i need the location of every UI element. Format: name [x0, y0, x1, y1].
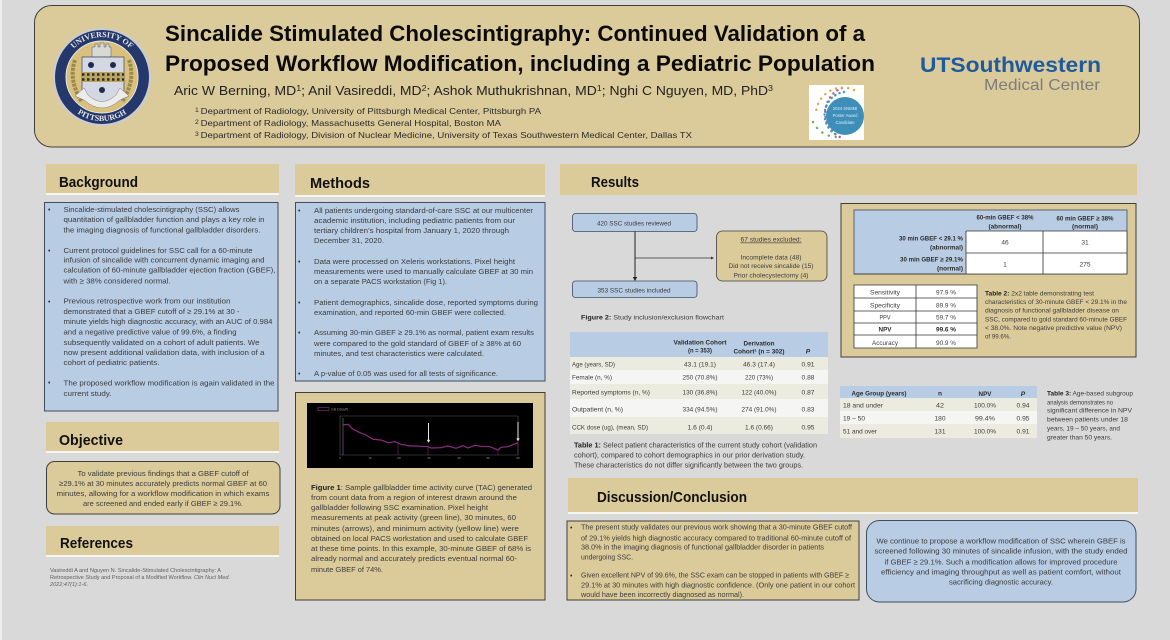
icon: poster award badge: Candidate — [835, 120, 855, 125]
chart: gallbladder time activity curve: 0 — [339, 456, 341, 460]
table 1 caption — [574, 440, 817, 470]
table 1 caption: These characteristics do not differ significantly between the two groups. — [574, 460, 803, 470]
table: test characteristics: NPV — [878, 326, 892, 334]
affiliations: Department of Radiology, Massachusetts General Hospital, Boston MA — [201, 118, 501, 128]
panel: objective text: minutes, allowing for a workflow modification in which exams — [56, 489, 270, 498]
arrow: reviewed to included — [633, 232, 637, 281]
heading: Objective: Objective — [59, 432, 123, 449]
table 1: patient characteristics: 46.3 (17.4) — [743, 362, 775, 368]
panel: methods text: Data were processed on Xeleris workstations. Pixel height — [314, 257, 516, 266]
table 3 caption: years, 19 – 50 years, and — [1047, 426, 1120, 432]
panel: discussion text: Given excellent NPV of 99.6%, the SSC exam can be stopped in patients with GBEF ≥ — [581, 570, 849, 580]
heading: References: References — [60, 535, 133, 552]
table: test characteristics: 59.7 % — [936, 314, 956, 322]
heading: Background — [46, 164, 279, 195]
table 3: age subgroup analysis — [840, 386, 1037, 438]
authors: ; Anil Vasireddi, MD — [301, 84, 422, 98]
panel: background text: with ≥ 38% considered normal. — [62, 276, 170, 286]
panel: methods text: • — [298, 371, 301, 378]
heading: Methods: Methods — [310, 175, 370, 192]
table 3: age subgroup analysis: 131 — [934, 428, 946, 436]
table: test characteristics: Accuracy — [872, 340, 899, 347]
table 1: patient characteristics: 0.83 — [802, 406, 815, 414]
panel: methods text: Patient demographics, sincalide dose, reported symptoms during — [314, 298, 538, 307]
flow box: excluded studies: Did not receive sincalide (15) — [728, 263, 814, 270]
heading: Discussion/Conclusion — [568, 478, 1138, 514]
chart: gallbladder time activity curve: 30 — [427, 456, 431, 460]
figure 1 caption: measurements at peak activity (green line), 30 minutes, 60 — [311, 513, 516, 522]
table 1: patient characteristics: 0.91 — [802, 362, 815, 368]
table: test characteristics: 89.9 % — [936, 302, 956, 310]
panel: background text: calculation of 60-minute gallbladder ejection fraction (GBEF), — [64, 266, 276, 274]
figure 1 caption: Figure 1: Sample gallbladder time activity curve (TAC) generated — [311, 483, 532, 492]
panel: methods text: on a separate PACS workstation (Fig 1). — [314, 277, 447, 286]
panel: methods text: measurements were used to manually calculate GBEF at 30 min — [314, 267, 533, 276]
table 2: 2x2 contingency: (abnormal) — [930, 244, 963, 252]
table 2: 2x2 contingency — [854, 210, 1127, 274]
table: test characteristics — [854, 285, 977, 348]
table 2 caption: diagnosis of functional gallbladder disease on — [985, 308, 1119, 314]
affiliations: Department of Radiology, Division of Nuclear Medicine, University of Texas Southwestern Medical Center, Dallas TX — [201, 130, 692, 140]
table 2: 2x2 contingency: 46 — [1001, 240, 1009, 246]
heading: Results — [560, 164, 1137, 195]
panel: background text: the imaging diagnosis of functional gallbladder disorders. — [64, 226, 260, 234]
flow box: studies included: 353 SSC studies included — [598, 288, 671, 294]
table 2: 2x2 contingency: 30 min GBEF < 29.1 % — [899, 236, 963, 242]
table 2: 2x2 contingency: (abnormal) — [988, 224, 1022, 230]
affiliations: 1 — [195, 108, 201, 114]
table 2: 2x2 contingency: (normal) — [937, 266, 963, 272]
figure 1 caption — [311, 483, 532, 574]
panel: conclusion callout: sacrificing diagnostic accuracy. — [949, 578, 1053, 586]
panel: background text: • — [48, 380, 51, 387]
table 3: age subgroup analysis: NPV — [978, 391, 992, 398]
panel: background text: infusion of sincalide with concurrent dynamic imaging and — [64, 256, 264, 264]
table 1: patient characteristics: Age (years, SD) — [572, 362, 615, 368]
panel: background text: • — [48, 248, 51, 255]
panel: objective text: To validate previous findings that a GBEF cutoff of — [78, 469, 249, 478]
authors: 3 — [768, 84, 774, 93]
panel: background text: minute yields high diagnostic accuracy, with an AUC of 0.984 — [64, 317, 273, 326]
panel: background text: cohort of pediatric patients. — [64, 358, 160, 367]
chart: gallbladder time activity curve: 20 — [397, 456, 401, 460]
heading: Discussion/Conclusion: Discussion/Conclusion — [597, 489, 747, 506]
figure 1 caption: minutes (arrows), and minimum activity (yellow line) were — [311, 524, 519, 533]
table 1: patient characteristics: 43.1 (19.1) — [684, 362, 716, 368]
figure 1 caption: minute GBEF of 74%. — [311, 565, 383, 574]
figure 1 caption: obtained on local PACS workstation and used to calculate GBEF — [311, 534, 528, 543]
panel: background text — [44, 202, 278, 411]
table 3 caption: Table 3: Age-based subgroup — [1047, 390, 1133, 398]
panel: methods text: • — [298, 259, 301, 266]
table: test characteristics: 99.6 % — [936, 326, 956, 334]
chart: gallbladder time activity curve: 50 — [486, 456, 490, 460]
affiliations — [195, 106, 692, 140]
table 3: age subgroup analysis: 0.95 — [1016, 416, 1030, 422]
panel: methods text: • — [298, 330, 301, 337]
flow box: studies reviewed — [572, 214, 697, 232]
panel: figure 1 — [296, 392, 545, 600]
table 2: 2x2 contingency: 60 min GBEF ≥ 38% — [1056, 216, 1114, 222]
panel: poster header — [34, 5, 1140, 148]
table 1 caption: cohort), compared to cohort demographics in our prior derivation study. — [574, 450, 805, 460]
figure 2 caption: Figure 2: Study inclusion/exclusion flowchart — [581, 314, 724, 322]
table 3 caption: between patients under 18 — [1047, 416, 1128, 424]
panel: conclusion callout — [866, 520, 1136, 602]
panel: conclusion callout: if GBEF ≥ 29.1%. Such a modification allows for improved procedure — [884, 558, 1118, 566]
heading: Methods — [295, 164, 545, 197]
table 1: patient characteristics: Outpatient (n, %) — [572, 406, 623, 414]
flow box: excluded studies: Incomplete data (48) — [740, 254, 802, 262]
figure 1 caption: gallbladder following SSC examination. Pixel height — [311, 503, 489, 512]
table 1: patient characteristics: Derivation — [744, 340, 774, 348]
panel: discussion text: undergoing SSC. — [581, 552, 633, 562]
heading: Results: Results — [591, 174, 639, 191]
flow box: studies reviewed: 420 SSC studies reviewed — [597, 220, 671, 228]
flow box: studies included — [572, 281, 697, 298]
icon: University of Pittsburgh seal — [53, 28, 151, 126]
table 1: patient characteristics: 334 (94.5%) — [682, 406, 718, 414]
table 3: age subgroup analysis: P — [1021, 391, 1026, 398]
panel: discussion text: would have been incorrectly diagnosed as normal). — [580, 590, 744, 599]
table 2: 2x2 contingency: 60-min GBEF < 38% — [976, 214, 1034, 222]
panel: methods text: were compared to the gold standard of GBEF of ≥ 38% at 60 — [313, 339, 521, 348]
flow box: excluded studies: Prior cholecystectomy (4) — [734, 272, 808, 280]
panel: discussion text — [567, 521, 859, 600]
panel: background text: The proposed workflow modification is again validated in the — [64, 378, 274, 388]
panel: background text: now present additional validation data, with inclusion of a — [64, 348, 265, 357]
reference text: Vasireddi A and Nguyen N. Sincalide-Stimulated Cholescintigraphy: A — [50, 568, 221, 574]
heading: Objective — [46, 422, 279, 453]
table 2 caption: Table 2: 2x2 table demonstrating test — [985, 290, 1094, 298]
table 1: patient characteristics: (n = 353) — [688, 348, 712, 354]
panel: discussion text: • — [570, 573, 573, 580]
panel: methods text: A p-value of 0.05 was used for all tests of significance. — [314, 369, 498, 378]
panel: conclusion callout: We continue to propose a workflow modification of SSC wherein GBEF is — [876, 536, 1126, 546]
panel: conclusion callout: screened following 30 minutes of sincalide infusion, with the study ended — [874, 546, 1128, 556]
table 1: patient characteristics: 0.88 — [802, 374, 815, 382]
reference text — [49, 568, 230, 588]
table 3: age subgroup analysis: Age Group (years) — [852, 390, 906, 398]
table 1: patient characteristics: Validation Cohort — [674, 340, 727, 346]
table 3: age subgroup analysis: 99.4% — [975, 416, 995, 422]
table 2 caption: characteristics of 30-minute GBEF < 29.1% in the — [985, 299, 1127, 306]
table 1: patient characteristics: 130 (36.8%) — [682, 390, 718, 396]
table: test characteristics: Sensitivity — [870, 290, 901, 296]
logo: UT Southwestern Medical Center: Medical Center — [984, 77, 1101, 94]
table 3: age subgroup analysis: 100.0% — [974, 402, 996, 410]
panel: discussion text: • — [570, 525, 573, 532]
chart: gallbladder time activity curve: 40 — [457, 456, 461, 460]
panel: background text: quantitation of gallbladder function and plays a key role in — [64, 215, 264, 224]
flowchart: study inclusion — [572, 214, 827, 298]
table 1: patient characteristics — [570, 332, 828, 434]
table 1: patient characteristics: 220 (73%) — [745, 374, 773, 382]
table 3: age subgroup analysis: n — [938, 390, 942, 398]
table 2 caption: of 99.6%. — [985, 334, 1011, 340]
flow box: excluded studies — [716, 231, 827, 281]
table 1: patient characteristics: 1.6 (0.4) — [688, 424, 712, 432]
table 1: patient characteristics: Female (n, %) — [572, 374, 612, 382]
table 1: patient characteristics: Cohort¹ (n = 302) — [734, 348, 784, 356]
panel: discussion text: 38.0% in the imaging diagnosis of functional gallbladder disorder in patients — [581, 542, 824, 552]
panel: background text: and a negative predictive value of 99.6%, a finding — [64, 328, 236, 336]
panel: objective text: are screened and ended early if GBEF ≥ 29.1%. — [83, 499, 243, 508]
table 1: patient characteristics: CCK dose (ug), (mean, SD) — [572, 424, 648, 432]
affiliations: 3 — [195, 132, 201, 138]
heading: Background: Background — [59, 174, 138, 191]
table 3 caption: analysis demonstrates no — [1047, 400, 1113, 406]
table 3: age subgroup analysis: 51 and over — [843, 428, 878, 436]
panel: objective text — [46, 462, 280, 514]
table 2 caption — [985, 290, 1127, 340]
panel: methods text: • — [298, 300, 301, 307]
authors: 2 — [422, 84, 427, 93]
table 1: patient characteristics: P — [806, 348, 811, 356]
panel: methods text: December 31, 2020. — [314, 236, 384, 245]
reference text: Retrospective Study and Proposal of a Modified Workflow. Clin Nucl Med. — [50, 575, 230, 581]
panel: background text: Current protocol guidelines for SSC call for a 60-minute — [64, 246, 253, 255]
authors: ; Nghi C Nguyen, MD, PhD — [602, 84, 768, 98]
table 3: age subgroup analysis: 0.94 — [1016, 402, 1030, 410]
table 3: age subgroup analysis: 0.91 — [1016, 428, 1030, 436]
panel: methods text: academic institution, including pediatric patients from our — [314, 216, 515, 225]
table 2 caption: SSC, compared to gold standard 60-minute GBEF — [985, 316, 1127, 324]
panel: background text: Sincalide-stimulated cholescintigraphy (SSC) allows — [64, 205, 240, 214]
table 2: 2x2 contingency: 30 min GBEF ≥ 29.1% — [900, 256, 963, 264]
icon: poster award badge: 2024 SNMMI — [833, 106, 857, 111]
chart: gallbladder time activity curve: 10 — [368, 456, 372, 460]
panel: background text: Previous retrospective work from our institution — [64, 296, 230, 306]
panel: methods text: tertiary children’s hospital from January 1, 2020 through — [314, 226, 509, 235]
table 3: age subgroup analysis: 100.0% — [974, 428, 996, 436]
panel: methods text: • — [298, 208, 301, 215]
figure 1 caption: from count data from a region of interest drawn around the — [311, 493, 517, 502]
affiliations: 2 — [195, 120, 201, 126]
panel: table 2 — [841, 204, 1136, 357]
table 2 caption: < 38.0%. Note negative predictive value (NPV) — [985, 325, 1122, 332]
table: test characteristics: PPV — [880, 314, 891, 322]
panel: background text: • — [48, 299, 51, 306]
flow box: excluded studies: 67 studies excluded: — [740, 236, 802, 244]
table 3: age subgroup analysis: 42 — [936, 402, 944, 410]
table 1: patient characteristics: 1.6 (0.66) — [745, 424, 773, 432]
panel: discussion text: of 29.1% yields high diagnostic accuracy compared to traditional 60-minute cutoff of — [581, 534, 852, 542]
panel: conclusion callout: efficiency and imaging throughput as well as patient comfort, without — [881, 568, 1122, 576]
authors: ; Ashok Muthukrishnan, MD — [427, 84, 597, 98]
reference text: 2022;47(1):1-6. — [49, 582, 88, 588]
table 1: patient characteristics: 0.95 — [802, 424, 815, 432]
authors: 1 — [597, 84, 602, 93]
table 2: 2x2 contingency: 275 — [1079, 262, 1091, 268]
title: Proposed Workflow Modification, including a Pediatric Population — [165, 51, 875, 76]
panel: objective text: ≥29.1% at 30 minutes accurately predicts normal GBEF at 60 — [59, 479, 267, 488]
heading: References — [46, 526, 279, 557]
chart: gallbladder time activity curve — [307, 403, 533, 468]
panel: methods text: Assuming 30-min GBEF ≥ 29.1% as normal, patient exam results — [314, 328, 534, 337]
panel: background text: • — [48, 207, 51, 214]
arrow: to excluded — [635, 256, 714, 260]
table 3: age subgroup analysis: 18 and under — [843, 402, 884, 410]
affiliations: Department of Radiology, University of Pittsburgh Medical Center, Pittsburgh PA — [201, 106, 541, 116]
table 1: patient characteristics: 250 (70.8%) — [682, 374, 718, 382]
icon: University of Pittsburgh seal: PITTSBURGH — [78, 109, 127, 121]
table 3: age subgroup analysis: 19 – 50 — [843, 416, 865, 422]
table 2: 2x2 contingency: 1 — [1003, 262, 1007, 268]
table 2: 2x2 contingency: (normal) — [1072, 224, 1098, 230]
panel: background text: current study. — [64, 389, 112, 398]
panel: methods text: examination, and reported 60-min GBEF were collected. — [314, 308, 506, 317]
table: test characteristics: 97.9 % — [936, 290, 956, 296]
panel: background text: subsequently validated on a cohort of adult patients. We — [64, 338, 260, 347]
table 1: patient characteristics: 274 (91.0%) — [742, 406, 776, 414]
panel: background text: demonstrated that a GBEF cutoff of ≥ 29.1% at 30 - — [64, 307, 240, 316]
figure 1 caption: at these time points. In this example, 30-minute GBEF of 68% is — [311, 544, 531, 553]
title: Sincalide Stimulated Cholescintigraphy: Continued Validation of a — [165, 21, 865, 46]
table 3: age subgroup analysis: 180 — [934, 416, 946, 422]
authors: Aric W Berning, MD — [174, 84, 284, 98]
icon: poster award badge: Poster Award — [833, 113, 858, 118]
panel: discussion text: 29.1% at 30 minutes with high diagnostic confidence. (Only one patient in our cohort — [581, 580, 856, 590]
icon: University of Pittsburgh seal: UNIVERSITY OF — [70, 32, 134, 48]
logo: UT Southwestern Medical Center: UTSouthwestern — [920, 54, 1101, 77]
table 1 caption: Table 1: Select patient characteristics of the current study cohort (validation — [574, 440, 817, 450]
panel: methods text: minutes, and test characteristics were calculated. — [314, 349, 484, 358]
panel: discussion text: The present study validates our previous work showing that a 30-minute GBEF cutoff — [581, 522, 853, 532]
table 3 caption — [1047, 390, 1133, 442]
title — [165, 21, 875, 76]
authors: 1 — [296, 84, 302, 93]
table 1: patient characteristics: Reported symptoms (n, %) — [572, 390, 650, 396]
chart: gallbladder time activity curve: GB Data/fit — [331, 408, 348, 412]
chart: gallbladder time activity curve: 60 — [516, 456, 520, 460]
table 3 caption: significant difference in NPV — [1047, 408, 1133, 414]
table: test characteristics: 90.9 % — [936, 340, 956, 347]
logo: UT Southwestern Medical Center — [920, 54, 1101, 94]
table: test characteristics: Specificity — [870, 302, 901, 310]
table 2: 2x2 contingency: 31 — [1081, 240, 1089, 246]
table 1: patient characteristics: 122 (40.0%) — [742, 390, 776, 396]
table 1: patient characteristics: 0.87 — [802, 390, 815, 396]
panel: methods text: All patients undergoing standard-of-care SSC at our multicenter — [314, 206, 533, 215]
table 3 caption: greater than 50 years. — [1047, 434, 1112, 442]
panel: methods text — [296, 202, 545, 381]
figure 1 caption: already normal and accurately predicts eventual normal 60- — [311, 554, 517, 563]
icon: poster award badge — [809, 85, 864, 140]
